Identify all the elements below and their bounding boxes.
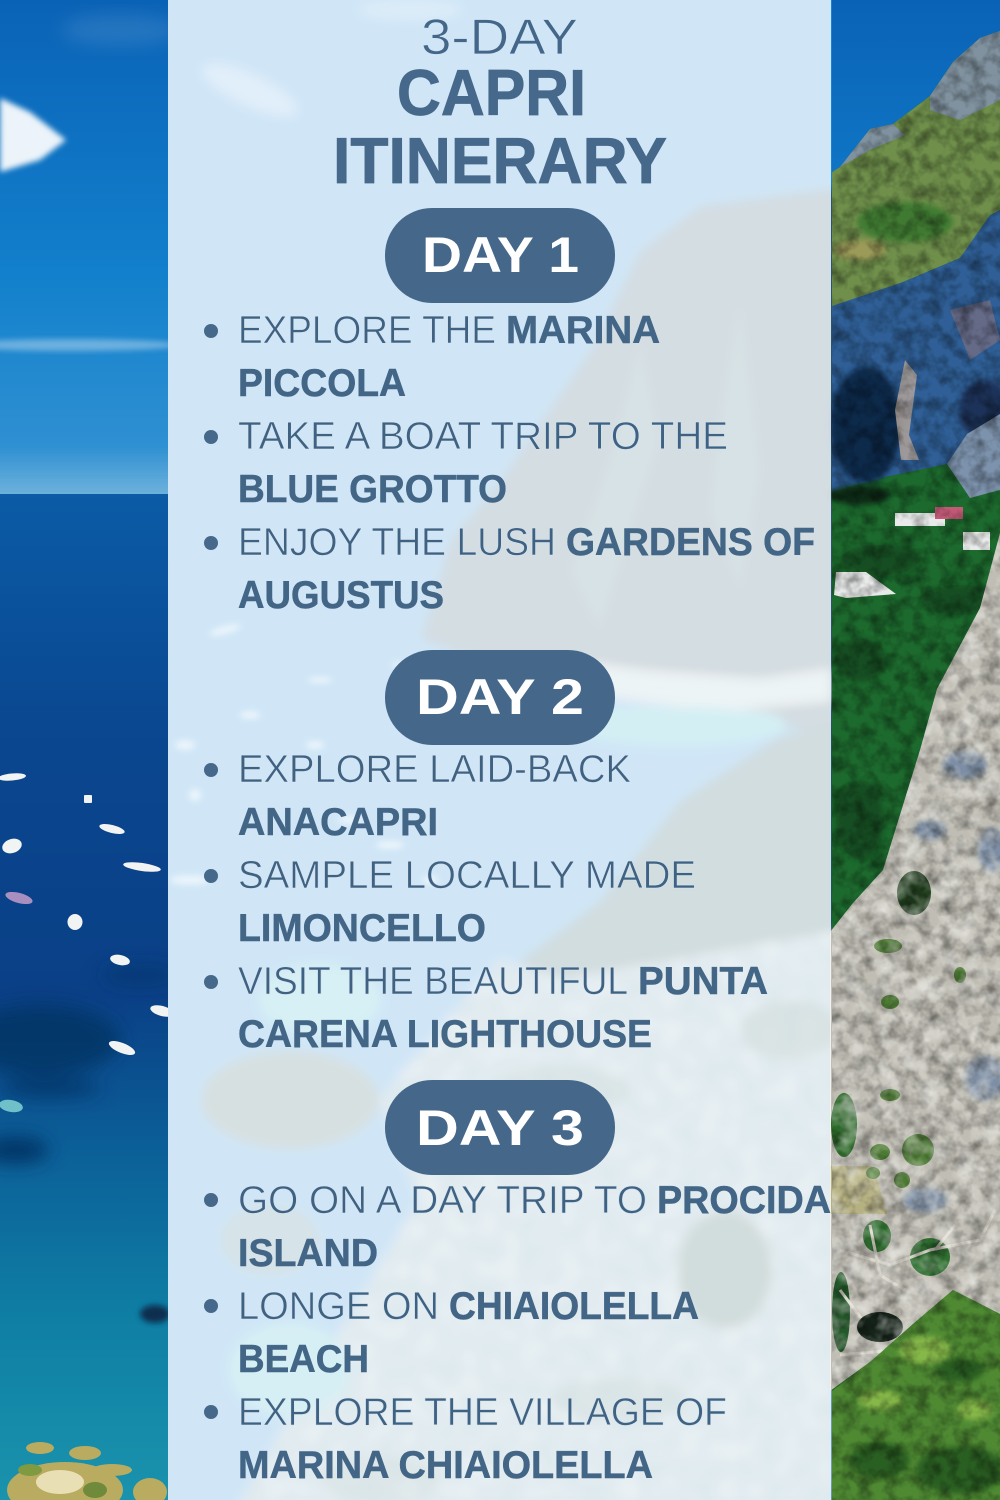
- item: Marina Chiaiolella: EXPLORE THE VILLAGE OF: [238, 1391, 727, 1434]
- item: Marina Piccola: PICCOLA: [238, 362, 406, 405]
- item: Punta Carena Lighthouse: CARENA LIGHTHOUSE: [238, 1013, 652, 1056]
- upper mountain: [420, 185, 850, 740]
- day 3 badge: [385, 1080, 615, 1175]
- item: Procida Island: ISLAND: [238, 1232, 378, 1275]
- dark water patches: [0, 963, 180, 1164]
- item: Gardens of Augustus: [204, 521, 815, 617]
- title line: ITINERARY: ITINERARY: [333, 124, 667, 197]
- item: Marina Piccola: [204, 309, 660, 405]
- item: Gardens of Augustus: GARDENS OF: [566, 521, 815, 564]
- day 2 badge: DAY 2: [416, 669, 584, 725]
- green lower slope: [523, 726, 832, 980]
- day 3 badge: DAY 3: [416, 1100, 584, 1156]
- item: Limoncello: LIMONCELLO: [238, 907, 486, 950]
- right cliff: forest shadows: [830, 485, 1000, 860]
- right cliff: pale limestone: [830, 533, 1000, 1391]
- item: Marina Piccola: MARINA: [506, 309, 660, 352]
- item: Anacapri: ANACAPRI: [238, 801, 438, 844]
- item: Procida Island: PROCIDA: [657, 1179, 831, 1222]
- item: Gardens of Augustus: AUGUSTUS: [238, 574, 444, 617]
- item: Procida Island: GO ON A DAY TRIP TO: [238, 1179, 647, 1222]
- item: Blue Grotto: BLUE GROTTO: [238, 468, 507, 511]
- item: Anacapri: [204, 748, 631, 844]
- foliage bottom-left: [7, 1442, 167, 1500]
- pale lower rocks: [230, 930, 850, 1500]
- item: Marina Chiaiolella: MARINA CHIAIOLELLA: [238, 1444, 653, 1487]
- item: Chiaiolella Beach: [204, 1285, 699, 1381]
- scene seen behind panel: [150, 0, 850, 1500]
- item: Marina Piccola: EXPLORE THE: [238, 309, 496, 352]
- green bush bottom-right: [832, 1290, 1000, 1500]
- day 1 badge: [385, 208, 615, 303]
- day 1 list: [204, 309, 815, 617]
- sky: [0, 0, 1000, 496]
- right cliff: green slope: [832, 31, 1000, 310]
- day 2 list: [204, 748, 768, 1056]
- item: Chiaiolella Beach: BEACH: [238, 1338, 369, 1381]
- boats: [0, 772, 175, 1114]
- item: Procida Island: [204, 1179, 831, 1275]
- houses: [834, 507, 990, 598]
- item: Blue Grotto: TAKE A BOAT TRIP TO THE: [238, 415, 728, 458]
- rock and foliage texture: [832, 30, 1000, 1500]
- item: Limoncello: SAMPLE LOCALLY MADE: [238, 854, 696, 897]
- day 2 badge: [385, 650, 615, 745]
- item: Limoncello: [204, 854, 696, 950]
- sea: [0, 494, 840, 1500]
- day 1 badge: DAY 1: [422, 227, 579, 283]
- item: Punta Carena Lighthouse: VISIT THE BEAUTIFUL: [238, 960, 628, 1003]
- mountain base: [832, 31, 1000, 1500]
- title line: 3-DAY: 3-DAY: [421, 9, 578, 65]
- item: Chiaiolella Beach: LONGE ON: [238, 1285, 439, 1328]
- day 3 list: [204, 1179, 831, 1487]
- dead tree branches: [840, 1210, 995, 1355]
- clouds: [0, 14, 180, 351]
- item: Chiaiolella Beach: CHIAIOLELLA: [449, 1285, 699, 1328]
- right cliff: blue rock face: [832, 210, 1000, 492]
- title line: CAPRI: CAPRI: [397, 56, 586, 129]
- ridge rock: [840, 31, 1000, 167]
- item: Marina Chiaiolella: [204, 1391, 727, 1487]
- title: [333, 9, 667, 197]
- item: Blue Grotto: [204, 415, 728, 511]
- item: Gardens of Augustus: ENJOY THE LUSH: [238, 521, 556, 564]
- item: Punta Carena Lighthouse: [204, 960, 768, 1056]
- panel: translucent itinerary column: [168, 0, 831, 1500]
- turquoise bay: [601, 710, 783, 739]
- item: Punta Carena Lighthouse: PUNTA: [638, 960, 768, 1003]
- item: Anacapri: EXPLORE LAID-BACK: [238, 748, 631, 791]
